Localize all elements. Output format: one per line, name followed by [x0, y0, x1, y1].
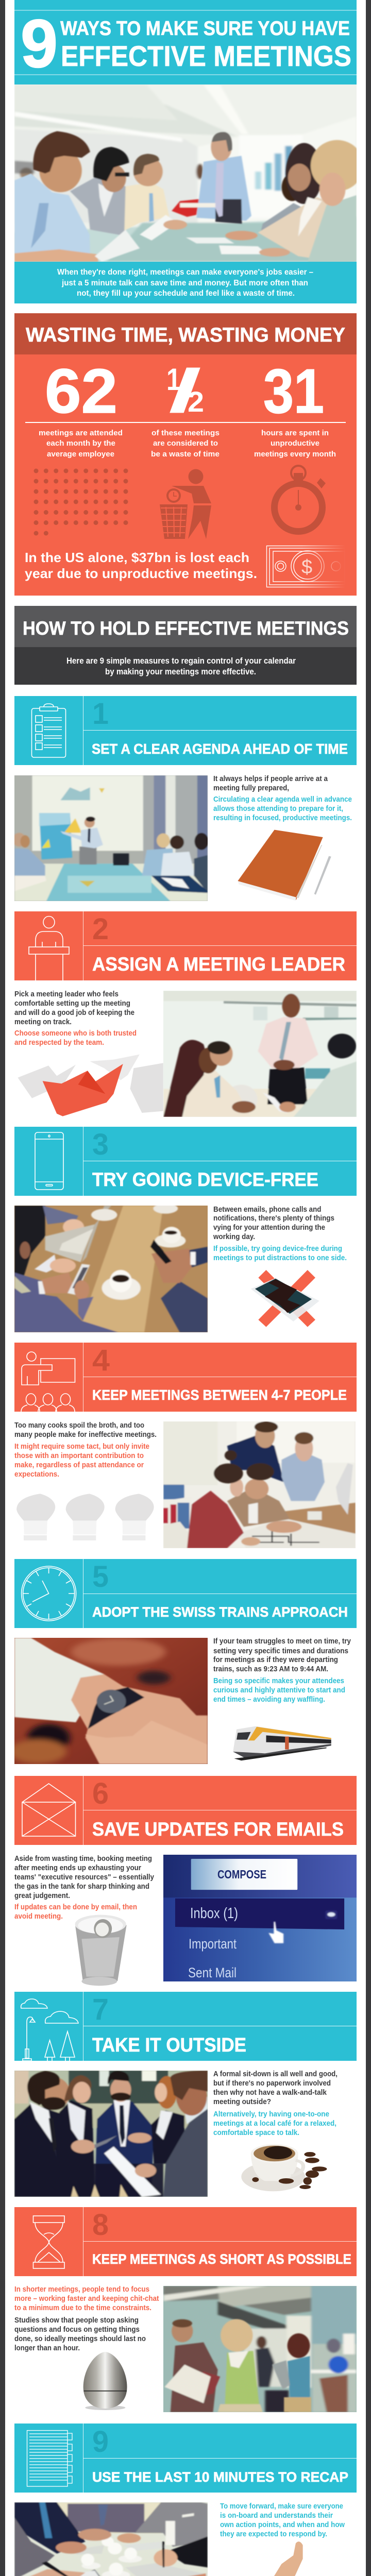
icon: wall clock — [22, 1566, 76, 1621]
text block: step 7 advice: meetings at a local café for a relaxed, — [213, 2119, 336, 2128]
photo: email inbox on screen — [163, 1855, 357, 1981]
text block: step 6 advice: teams' "executive resources" – essentially — [14, 1873, 155, 1882]
callout: $37bn lost — [25, 550, 257, 581]
icon: speaker at podium — [29, 916, 69, 980]
text block: step 7 advice: Alternatively, try having one-to-one — [213, 2110, 329, 2119]
screen label: important: Important — [189, 1936, 237, 1952]
text block: step 8 advice: to a minimum due to the time constraints. — [14, 2303, 151, 2312]
text block: step 5 advice: Being so specific makes your attendees — [213, 1676, 344, 1685]
icon: speeding banknote — [267, 546, 345, 587]
icon: lined notebook with tabs — [27, 2431, 72, 2486]
intro panel: not, they fill up your schedule and feel like a waste of time. — [77, 289, 295, 298]
photo: people in glass office corridor — [163, 2286, 357, 2412]
step number: 1 — [92, 697, 109, 731]
callout: $37bn lost: In the US alone, $37bn is lost each — [25, 550, 249, 565]
header: title banner — [14, 0, 357, 84]
text block: step 8 advice: done, so ideally meetings should last no — [14, 2334, 146, 2343]
text block: step 4 advice: those with an important contribution to — [14, 1451, 144, 1460]
icon: stopwatch — [274, 466, 326, 532]
text block: step 3 advice: meetings to put distractions to one side. — [213, 1253, 347, 1262]
step number: 8 — [92, 2208, 109, 2242]
step number: 6 — [92, 1777, 109, 1810]
stat caption 3 — [254, 429, 336, 459]
text block: step 1 advice: allows those attending to prepare for it, — [213, 804, 343, 813]
text block: step 5 advice: end times – avoiding any waffling. — [213, 1695, 325, 1704]
text block: step 9 advice: To move forward, make sure everyone — [220, 2502, 343, 2511]
stat: 31: 31 — [263, 356, 324, 426]
stat caption 1: each month by the — [46, 439, 115, 448]
icon: presenter and audience — [21, 1352, 75, 1412]
text block: step 7 advice: then why not have a walk-and-talk — [213, 2088, 327, 2097]
step number: 2 — [92, 912, 109, 946]
photo: laughing leader standing above team — [163, 991, 357, 1117]
text block: step 7 advice: meeting outside? — [213, 2097, 271, 2106]
text block: step 6 advice: avoid meeting. — [14, 1912, 63, 1921]
callout: $37bn lost: year due to unproductive meetings. — [25, 566, 257, 581]
step number: 4 — [92, 1344, 110, 1377]
image: paper boats — [18, 1055, 163, 1116]
step title: KEEP MEETINGS BETWEEN 4-7 PEOPLE — [92, 1387, 347, 1403]
step 3 header — [14, 1127, 357, 1196]
image: orange notebook and pen — [238, 830, 331, 901]
text block: step 1 advice: Circulating a clear agenda well in advance — [213, 795, 352, 804]
stat caption 2: be a waste of time — [151, 450, 220, 459]
text block: step 8 advice: Studies show that people stop asking — [14, 2316, 139, 2325]
step 6 header — [14, 1776, 357, 1845]
heading: HOW TO HOLD EFFECTIVE MEETINGS — [23, 618, 349, 639]
text block: step 2 advice: Pick a meeting leader who feels — [14, 990, 119, 998]
photo: meeting with documents and coffee — [14, 2502, 208, 2576]
stat caption 2: are considered to — [153, 439, 218, 448]
photo: team meeting around a glass table — [14, 84, 357, 262]
text block: step 1 advice: It always helps if people arrive at a — [213, 774, 328, 783]
panel: wasting time, wasting money — [14, 313, 357, 596]
photo: presenter at flip chart — [14, 775, 208, 901]
step number: 9 — [92, 2425, 109, 2459]
text block: step 9 advice: is on-board and understands their — [220, 2511, 333, 2520]
intro text — [66, 656, 296, 676]
text block: step 5 advice — [213, 1637, 351, 1704]
stat caption 1: average employee — [47, 450, 114, 459]
text block: step 6 advice: after meeting ends up exhausting your — [14, 1863, 141, 1872]
stat caption 1 — [39, 429, 123, 459]
step title: TAKE IT OUTSIDE — [92, 2035, 246, 2056]
panel: how to hold effective meetings — [14, 606, 357, 685]
step title: ADOPT THE SWISS TRAINS APPROACH — [92, 1604, 348, 1620]
title line two: EFFECTIVE MEETINGS — [61, 40, 351, 72]
stat: 62: 62 — [45, 356, 117, 426]
step 2 header — [14, 911, 357, 980]
intro text: Here are 9 simple measures to regain control of your calendar — [66, 656, 296, 666]
text block: step 8 advice — [14, 2285, 159, 2352]
text block: step 2 advice: comfortable setting up the meeting — [14, 999, 130, 1008]
text block: step 8 advice: longer than an hour. — [14, 2344, 80, 2352]
step 5 header — [14, 1559, 357, 1628]
photo: team studying blueprints — [163, 1421, 356, 1548]
text block: step 4 advice: make, regardless of past attendance or — [14, 1461, 144, 1469]
text block: step 7 advice: but if there's no paperwork involved — [213, 2079, 331, 2088]
stat caption 1: meetings are attended — [39, 429, 123, 437]
photo: devices on a wooden meeting table — [14, 1206, 208, 1332]
intro panel: just a 5 minute talk can save time and money. But more often than — [61, 279, 308, 287]
text block: step 5 advice: curious and highly attentive to start and — [213, 1686, 345, 1694]
intro panel — [14, 262, 357, 303]
text block: step 2 advice: and will do a good job of keeping the — [14, 1008, 134, 1017]
text block: step 1 advice: meeting fully prepared, — [213, 784, 289, 792]
text block: step 2 advice — [14, 990, 137, 1047]
step title: SAVE UPDATES FOR EMAILS — [92, 1819, 344, 1840]
text block: step 9 advice — [220, 2502, 345, 2538]
text block: step 1 advice: resulting in focused, productive meetings. — [213, 814, 352, 822]
stat caption 3: hours are spent in — [261, 429, 329, 437]
step number: 7 — [92, 1993, 109, 2026]
text block: step 6 advice: great judgement. — [14, 1891, 70, 1900]
image: clock in waste basket — [75, 1915, 127, 1986]
heading: WASTING TIME, WASTING MONEY — [26, 324, 345, 346]
stat caption 2 — [151, 429, 220, 459]
stat caption 3: meetings every month — [254, 450, 336, 459]
stat: one half: / — [168, 357, 201, 425]
icon: park scene — [21, 1999, 78, 2061]
text block: step 3 advice: notifications, there's plenty of things — [213, 1214, 334, 1223]
text block: step 4 advice: Too many cooks spoil the broth, and too — [14, 1421, 144, 1430]
text block: step 4 advice: many people make for ineffective meetings. — [14, 1430, 157, 1439]
icon: clipboard checklist — [32, 704, 66, 757]
stat: one half: 2 — [188, 385, 204, 418]
text block: step 8 advice: more – working faster and keeping chit-chat — [14, 2294, 159, 2303]
icon: 62 dots — [34, 469, 128, 536]
text block: step 6 advice: Aside from wasting time, booking meeting — [14, 1854, 152, 1863]
text block: step 3 advice: Between emails, phone calls and — [213, 1205, 322, 1214]
text block: step 3 advice: If possible, try going device-free during — [213, 1244, 342, 1253]
icon: smartphone — [35, 1132, 63, 1190]
stat: one half — [166, 357, 204, 425]
text block: step 7 advice — [213, 2070, 338, 2137]
icon: hourglass — [33, 2216, 64, 2268]
intro panel: When they're done right, meetings can make everyone's jobs easier – — [57, 268, 313, 277]
image: three chef hats — [16, 1494, 154, 1540]
step title: USE THE LAST 10 MINUTES TO RECAP — [92, 2469, 348, 2485]
screen label: compose: COMPOSE — [217, 1868, 266, 1881]
text block: step 5 advice: for meetings as if they were departing — [213, 1655, 338, 1664]
icon: figure throwing a clock in a bin — [160, 469, 211, 539]
text block: step 8 advice: In shorter meetings, people tend to focus — [14, 2285, 149, 2294]
step title: KEEP MEETINGS AS SHORT AS POSSIBLE — [92, 2251, 351, 2267]
stat: one half: 1 — [166, 362, 181, 397]
text block: step 2 advice: Choose someone who is both trusted — [14, 1029, 137, 1038]
photo: wristwatch close-up — [14, 1638, 208, 1764]
text block: step 9 advice: own action points, and when and how — [220, 2520, 345, 2529]
text block: step 2 advice: meeting on track. — [14, 1018, 72, 1026]
text block: step 7 advice: comfortable space to talk. — [213, 2128, 299, 2137]
stat caption 3: unproductive — [271, 439, 319, 448]
step 7 header — [14, 1992, 357, 2061]
banknote dollar sign: $ — [301, 556, 312, 578]
image: commuter train — [233, 1726, 331, 1760]
text block: step 2 advice: and respected by the team. — [14, 1038, 104, 1047]
step title: SET A CLEAR AGENDA AHEAD OF TIME — [92, 741, 348, 757]
text block: step 5 advice: trains, such as 9:23 AM to 9:44 AM. — [213, 1665, 328, 1673]
text block: step 9 advice: they are expected to respond by. — [220, 2530, 327, 2538]
step 1 header — [14, 696, 357, 765]
step 9 header — [14, 2424, 357, 2493]
image: egg timer — [83, 2352, 127, 2410]
text block: step 3 advice: vying for your attention during the — [213, 1223, 325, 1232]
stat caption 2: of these meetings — [151, 429, 220, 437]
text block: step 4 advice — [14, 1421, 157, 1479]
text block: step 5 advice: setting very specific times and durations — [213, 1647, 348, 1655]
text block: step 6 advice: the gas in the tank for sharp thinking and — [14, 1882, 149, 1891]
photo: colleagues talking outdoors — [14, 2071, 208, 2197]
text block: step 7 advice: A formal sit-down is all well and good, — [213, 2070, 338, 2078]
step number: 3 — [92, 1128, 109, 1161]
image: thumbs up — [208, 2541, 323, 2576]
step title: ASSIGN A MEETING LEADER — [92, 954, 345, 975]
icon: open envelope — [22, 1784, 75, 1836]
text block: step 4 advice: It might require some tact, but only invite — [14, 1442, 149, 1451]
text block: step 3 advice: working day. — [213, 1232, 255, 1241]
text block: step 6 advice — [14, 1854, 155, 1921]
text block: step 3 advice — [213, 1205, 347, 1262]
step title: TRY GOING DEVICE-FREE — [92, 1169, 318, 1190]
step 8 header — [14, 2207, 357, 2276]
text block: step 6 advice: If updates can be done by email, then — [14, 1903, 137, 1911]
text block: step 8 advice: questions and focus on getting things — [14, 2325, 140, 2334]
step number: 5 — [92, 1560, 109, 1594]
image: coffee cup and beans — [241, 2144, 327, 2191]
step 4 header — [14, 1343, 357, 1412]
image: phone crossed out — [251, 1270, 319, 1327]
screen label: inbox: Inbox (1) — [190, 1905, 238, 1922]
title numeral 9: 9 — [21, 6, 58, 81]
text block: step 1 advice — [213, 774, 352, 822]
screen label: sent mail: Sent Mail — [188, 1965, 237, 1980]
intro text: by making your meetings more effective. — [105, 667, 256, 676]
text block: step 4 advice: expectations. — [14, 1470, 59, 1479]
text block: step 5 advice: If your team struggles to meet on time, try — [213, 1637, 351, 1646]
